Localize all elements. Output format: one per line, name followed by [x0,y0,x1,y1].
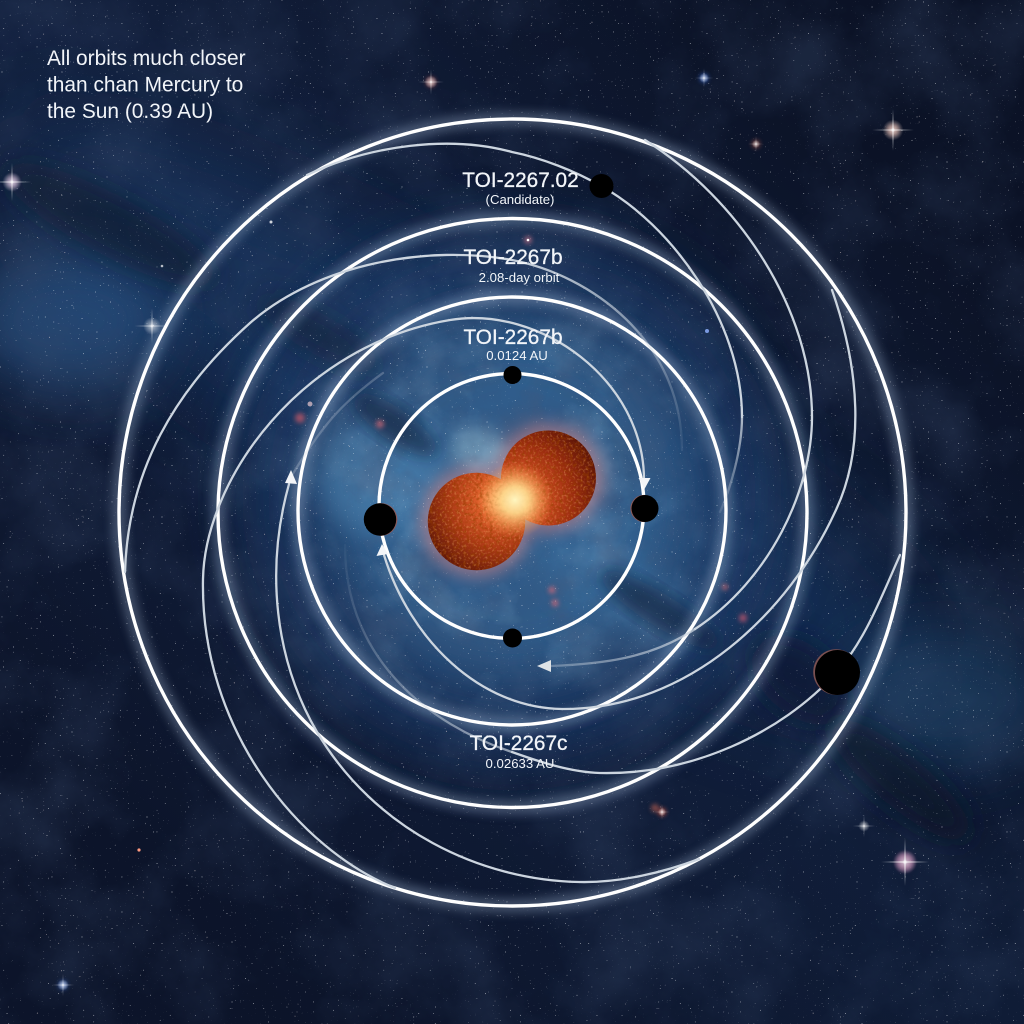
trail: TOI-2267.02 fading end [720,417,742,512]
planet: bottom inner [503,628,522,648]
trail: big planet spiral fading end [345,545,512,752]
label: TOI-2267.02: (Candidate) [486,192,554,207]
trail: TOI-2267.02 [307,144,742,417]
arrow: left inner [376,544,388,556]
trail: right spiral to lower arrow [645,140,812,629]
planet: large outer [813,649,860,695]
orbit ring glow [119,119,906,906]
direction arrows [285,470,650,672]
orbit rings [119,119,906,906]
arrow: right inner [638,478,650,489]
label: TOI-2267c: TOI-2267c [470,732,567,755]
label: TOI-2267b distance: 0.0124 AU [486,348,548,363]
trail: outer right spiral to left planet [384,290,855,709]
trail: faint arc above upward arrow [291,373,383,477]
label: TOI-2267.02: TOI-2267.02 [462,169,579,192]
label: TOI-2267b period: 2.08-day orbit [479,270,560,285]
third orbit ring [298,297,726,725]
label: TOI-2267b period: TOI-2267b [463,246,563,269]
note: Mercury comparison: All orbits much closer [47,47,246,70]
arrow: left outer up [285,470,297,484]
second orbit ring [218,218,807,808]
trail: TOI-2267b upper [125,255,512,572]
trail: end of right spiral [551,629,695,666]
central binary stars [420,423,604,578]
spiral motion trails [125,140,900,888]
label: TOI-2267c [470,732,567,771]
planet: TOI-2267.02 [590,174,614,198]
label: TOI-2267b distance: TOI-2267b [463,326,563,349]
planets [364,174,860,695]
trail: inner spiral from outer ring to right planet [203,318,644,888]
outer orbit ring [119,119,906,906]
trail: big planet spiral [512,555,900,773]
planet: left inner [364,503,397,536]
label: TOI-2267b period [463,246,563,285]
planet: top inner [504,366,522,384]
note: Mercury comparison: the Sun (0.39 AU) [47,100,213,123]
trail: lower spiral with upward arrow [276,484,699,882]
label: TOI-2267c: 0.02633 AU [486,756,554,771]
label: TOI-2267b distance [463,326,563,363]
planet: right inner [630,495,658,522]
trail: TOI-2267b fading end [512,260,682,450]
inner orbit ring [379,374,644,638]
label: TOI-2267.02 [462,169,579,207]
note: Mercury comparison: than chan Mercury to [47,74,243,96]
note: Mercury comparison [47,47,246,123]
arrow: lower [537,660,551,672]
